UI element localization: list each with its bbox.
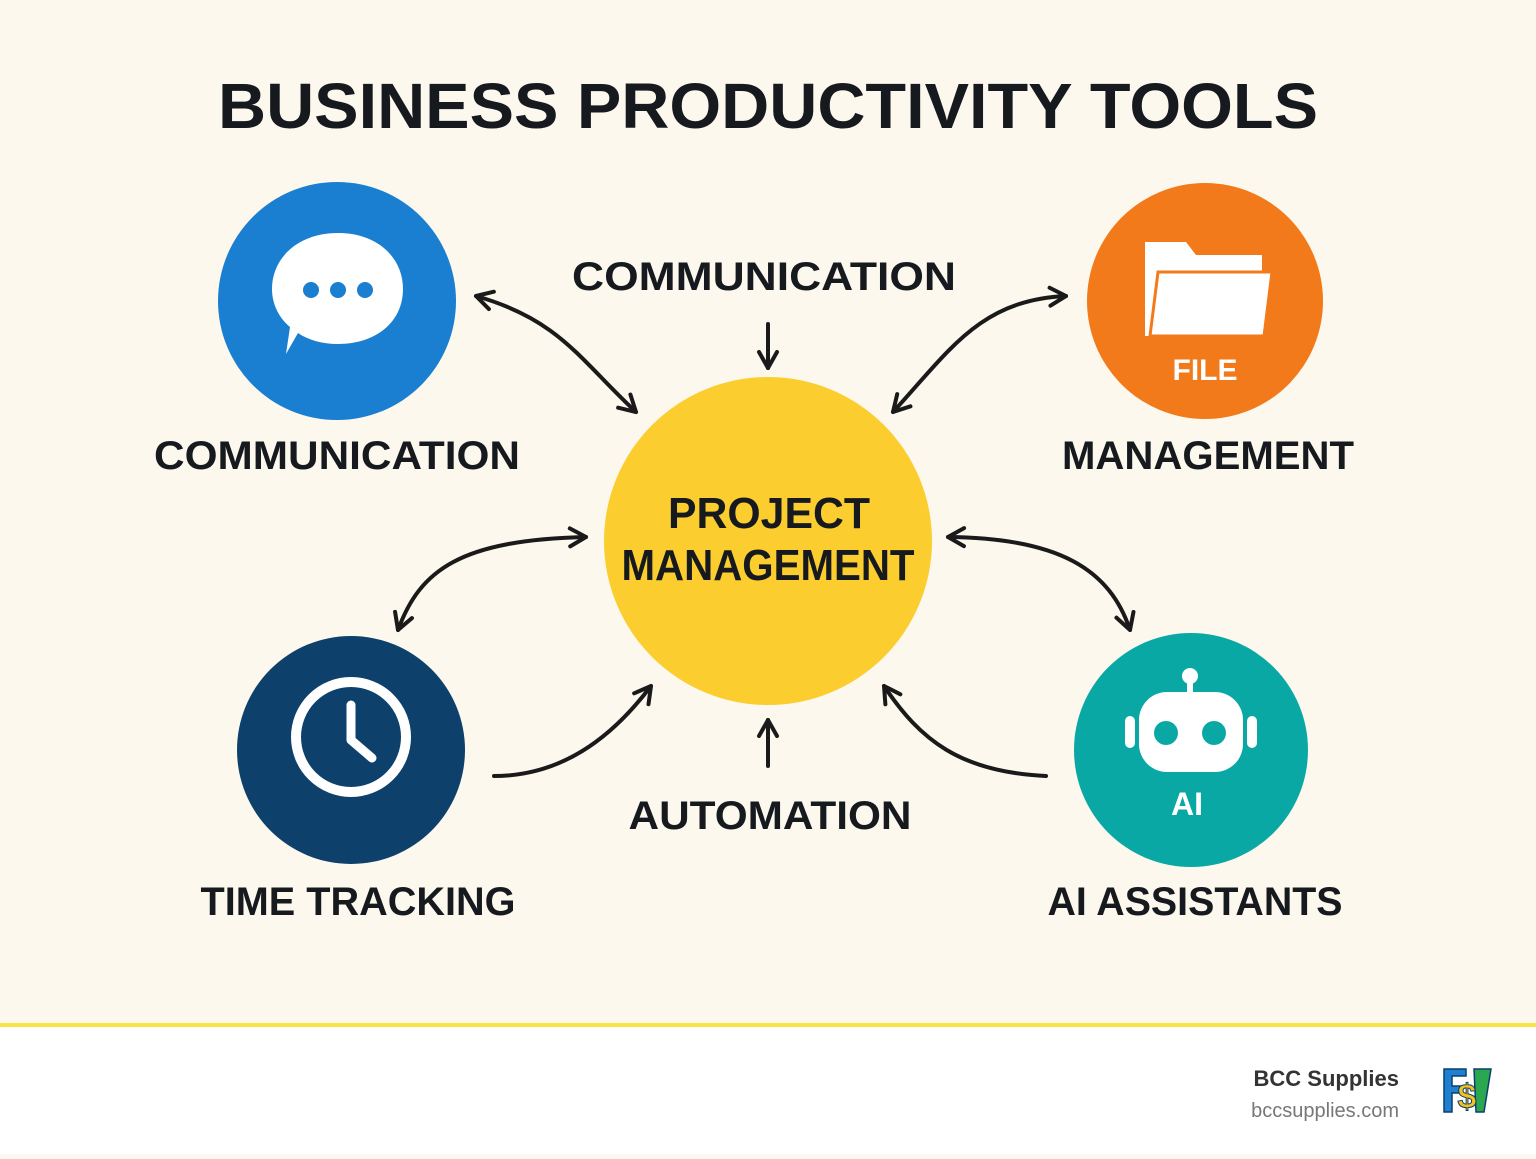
- icon: robot: [1125, 668, 1257, 772]
- circle: file management: FILE: [1172, 354, 1238, 387]
- footer: [0, 1023, 1536, 1154]
- logo: [1444, 1069, 1491, 1116]
- circle: project management: MANAGEMENT: [622, 541, 915, 590]
- label: automation: AUTOMATION: [628, 794, 912, 838]
- footer: BCC Supplies: [1254, 1066, 1399, 1091]
- circle: project management: PROJECT: [668, 489, 870, 538]
- circle: time tracking: [237, 636, 465, 864]
- circle: file management: [1087, 183, 1323, 419]
- circle: ai assistants: [1074, 633, 1308, 867]
- label: time tracking: TIME TRACKING: [200, 880, 516, 924]
- circle: project management: [604, 377, 932, 705]
- logo: $: [1458, 1078, 1477, 1116]
- label: communication: COMMUNICATION: [154, 434, 520, 478]
- icon: chat bubble: [272, 233, 403, 354]
- icon: folder: [1145, 242, 1272, 336]
- label: top communication: COMMUNICATION: [572, 255, 956, 299]
- circle: communication: [218, 182, 456, 420]
- footer: bccsupplies.com: [1251, 1100, 1399, 1122]
- label: management: MANAGEMENT: [1062, 434, 1354, 478]
- title: BUSINESS PRODUCTIVITY TOOLS: [218, 70, 1318, 142]
- circle: ai assistants: AI: [1171, 786, 1203, 822]
- icon: clock: [296, 682, 406, 792]
- label: ai assistants: AI ASSISTANTS: [1048, 880, 1342, 924]
- arrows: [398, 296, 1130, 776]
